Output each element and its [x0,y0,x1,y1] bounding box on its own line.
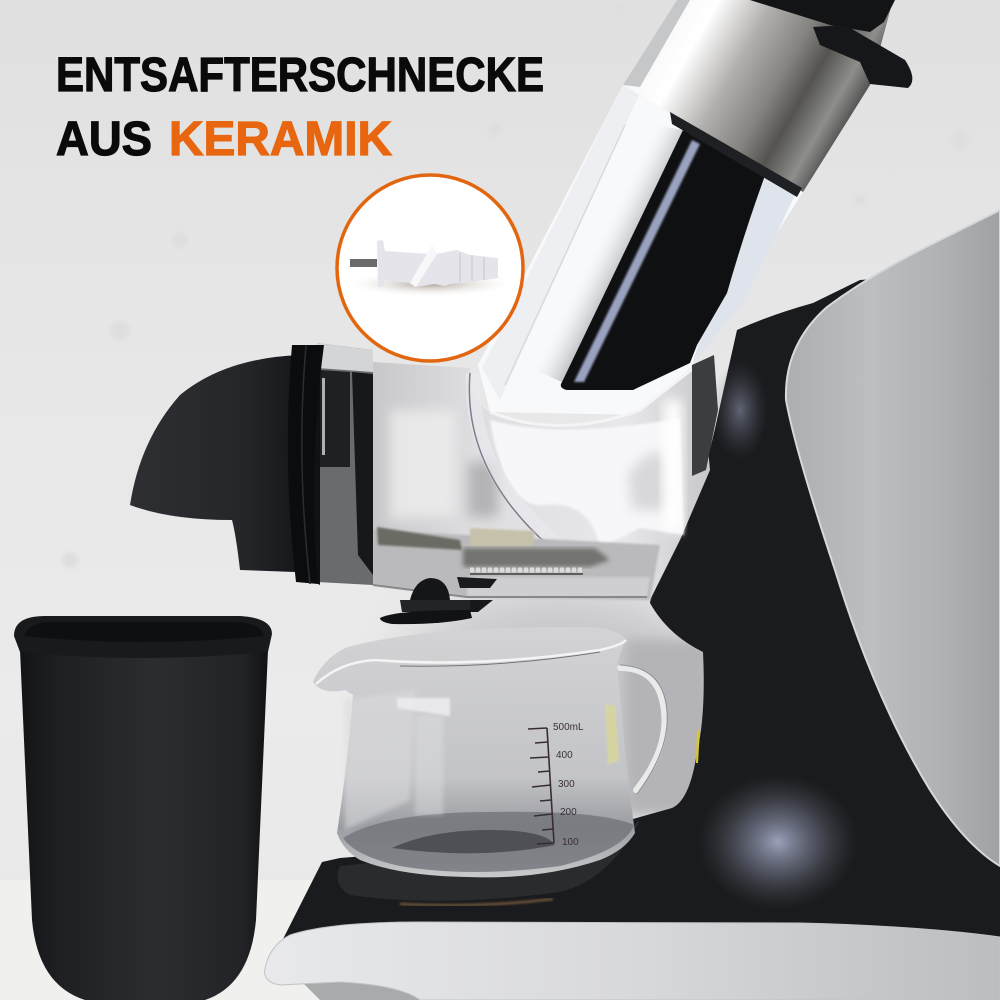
left collar [317,343,373,585]
tan filter [470,528,535,546]
ceramic auger [377,240,498,287]
feed chute [478,0,912,415]
perforation strip [470,568,583,572]
pulp residue [377,527,462,550]
title: KERAMIK [169,113,392,166]
black discharge spout [130,345,324,585]
auger shading [628,452,668,510]
white tray [265,922,1000,1000]
lower band [373,530,660,600]
pusher blue reflection [574,140,700,382]
clear sleeve upper strip [623,0,690,87]
light left wall seen through glass [345,690,415,830]
measuring scale [528,728,554,844]
clear lower strip [467,577,650,597]
auger inset circle [337,175,523,361]
grey patch behind auger [468,462,498,517]
lower housing highlight [698,774,858,910]
top and bottom rims [490,363,700,426]
right white blaze [664,400,682,530]
black pulp cup [14,616,272,1000]
clear chute tube [478,85,803,415]
juice outlet stopper [380,577,497,624]
base plate under jug [338,820,640,901]
clear juicing chamber [317,343,718,600]
upper housing highlight [712,360,768,460]
curved joint band [473,373,560,547]
silver side panel [786,210,1000,866]
left chamber bright streaks [390,410,455,520]
right clamp ring [692,355,718,476]
lid fin [813,25,912,88]
water film at bottom [343,812,634,872]
glass vessel [313,627,635,877]
juicer body [265,210,1000,1000]
inner reflections [397,698,450,716]
metal shaft [350,259,377,267]
white auger inside [490,418,684,548]
orange reflection [400,899,553,905]
title: ENTSAFTERSCHNECKE [56,49,544,102]
dark filter band [463,548,610,567]
pusher gradient band [535,125,683,382]
title [56,49,544,166]
dark pusher shaft [561,130,767,390]
glass measuring jug [313,627,667,877]
tray foot shadow [300,980,420,1000]
scale labels: 400 [556,750,573,761]
jug rim [316,640,626,684]
jug handle [620,668,664,790]
scale labels [553,722,584,848]
lid top disc [750,0,895,32]
steel collar [623,0,893,192]
dark sealing ring [670,112,802,197]
scale labels: 500mL [553,722,584,733]
scale labels: 300 [558,779,575,790]
yellow sticker edge [696,730,700,763]
clear tube right sliver [692,172,795,365]
scale labels: 100 [562,837,579,848]
scale labels: 200 [560,807,577,818]
dark machine housing [280,270,1000,945]
shadow under auger [342,271,518,297]
title: AUS [56,113,152,166]
